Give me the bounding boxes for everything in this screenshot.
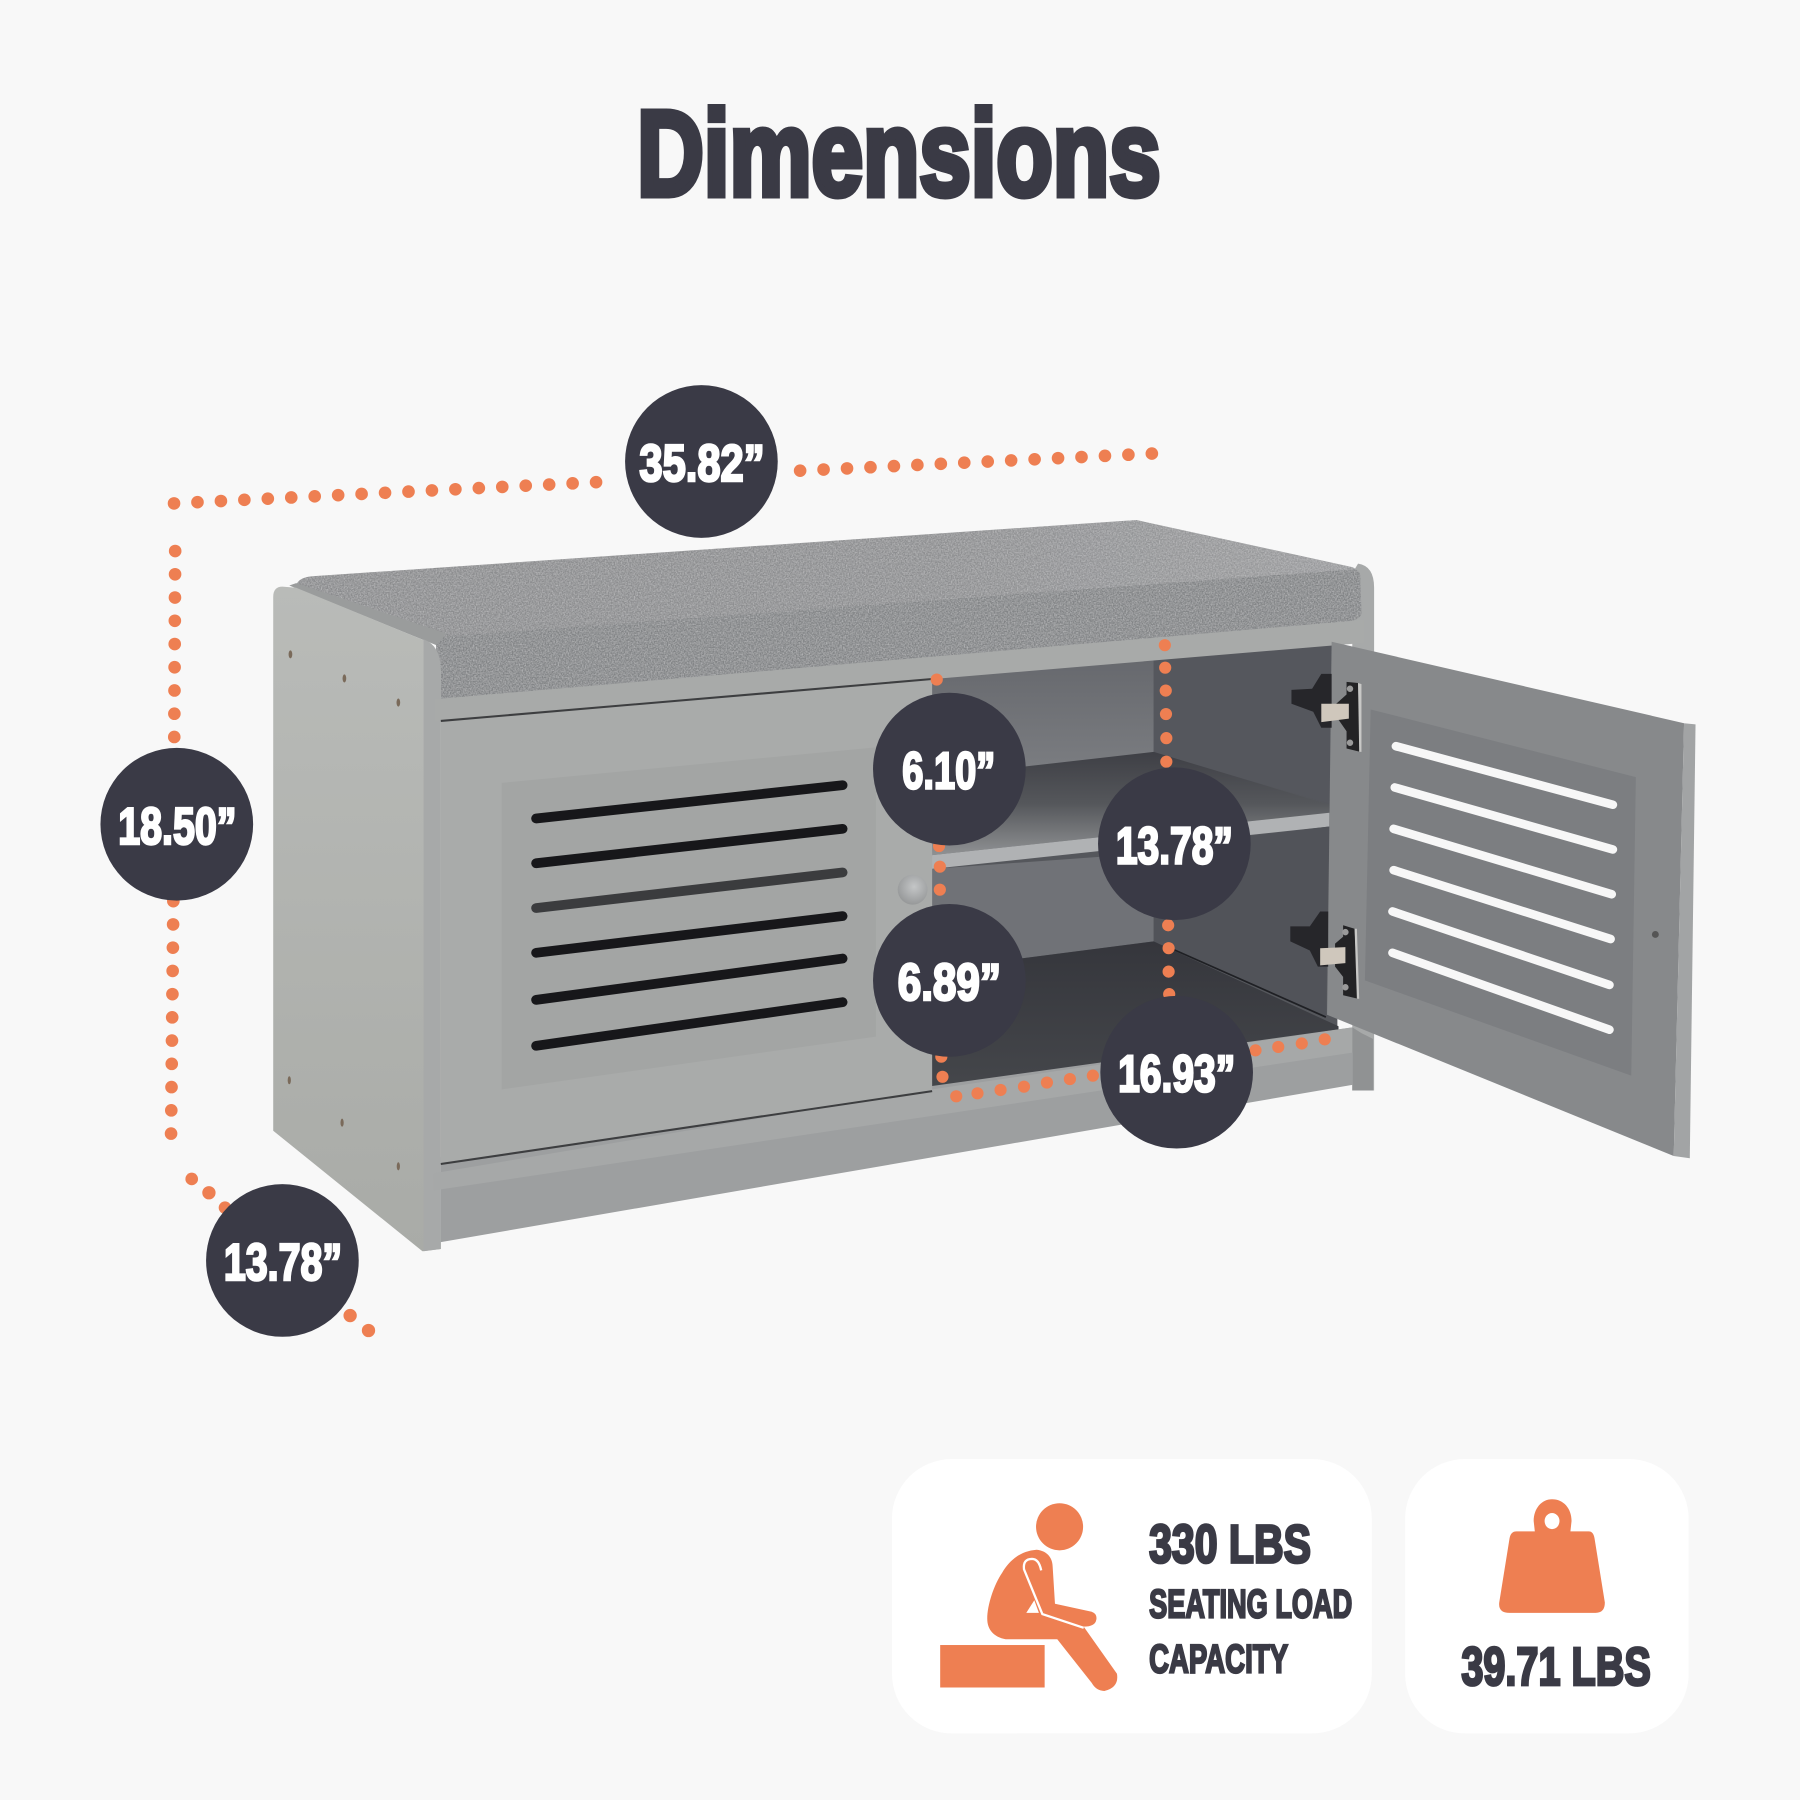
base plinth and rail — [434, 1027, 1373, 1242]
badge: 18.50 height — [100, 748, 253, 901]
badge: 35.82 width — [625, 385, 778, 538]
text: seating load: SEATING LOAD — [1149, 1581, 1352, 1626]
badge: 16.93 interior width — [1100, 996, 1253, 1149]
dotted line: overall height — [171, 551, 175, 1135]
icon: seated person — [940, 1503, 1117, 1691]
top rail — [435, 620, 1364, 721]
open right door — [1327, 642, 1696, 1158]
cushion — [296, 520, 1361, 703]
dotted line: left shelf heights — [931, 674, 949, 1083]
icon: weight — [1499, 1499, 1605, 1613]
hinge: lower — [1290, 911, 1359, 999]
right side panel — [1332, 564, 1374, 1091]
badge: 6.89 lower shelf: 6.89” — [898, 953, 1001, 1011]
badge: 13.78 depth — [206, 1184, 359, 1337]
dotted line: overall depth — [185, 1173, 375, 1337]
dotted line: overall width — [174, 453, 1155, 503]
badge: 6.10 upper shelf — [873, 693, 1026, 845]
badge: 13.78 depth: 13.78” — [224, 1233, 342, 1291]
badge: 18.50 height: 18.50” — [118, 797, 236, 855]
panel: seating load capacity — [892, 1459, 1372, 1733]
dotted line: interior depth — [1159, 639, 1175, 1000]
title: Dimensions — [637, 86, 1161, 221]
badge: 13.78 interior depth — [1098, 767, 1251, 920]
interior compartment — [931, 641, 1339, 1091]
badge: 35.82 width: 35.82” — [639, 434, 765, 492]
door knob — [898, 875, 928, 905]
badge: 16.93 interior width: 16.93” — [1118, 1045, 1235, 1103]
left side panel — [273, 583, 447, 1251]
hinge: upper — [1291, 674, 1361, 752]
door slats — [536, 785, 843, 1046]
shoe bench product illustration — [273, 520, 1696, 1251]
badge: 13.78 interior depth: 13.78” — [1116, 816, 1233, 874]
badge: 6.10 upper shelf: 6.10” — [902, 742, 995, 800]
left louvred door — [441, 678, 932, 1164]
badge: 6.89 lower shelf — [873, 904, 1026, 1057]
panel: product weight — [1405, 1459, 1689, 1733]
dotted line: interior width — [950, 1033, 1331, 1102]
door slats — [1392, 746, 1613, 1030]
text: capacity: CAPACITY — [1149, 1637, 1288, 1682]
text: 330 lbs: 330 LBS — [1149, 1514, 1311, 1574]
text: 39.71 lbs: 39.71 LBS — [1461, 1637, 1651, 1697]
